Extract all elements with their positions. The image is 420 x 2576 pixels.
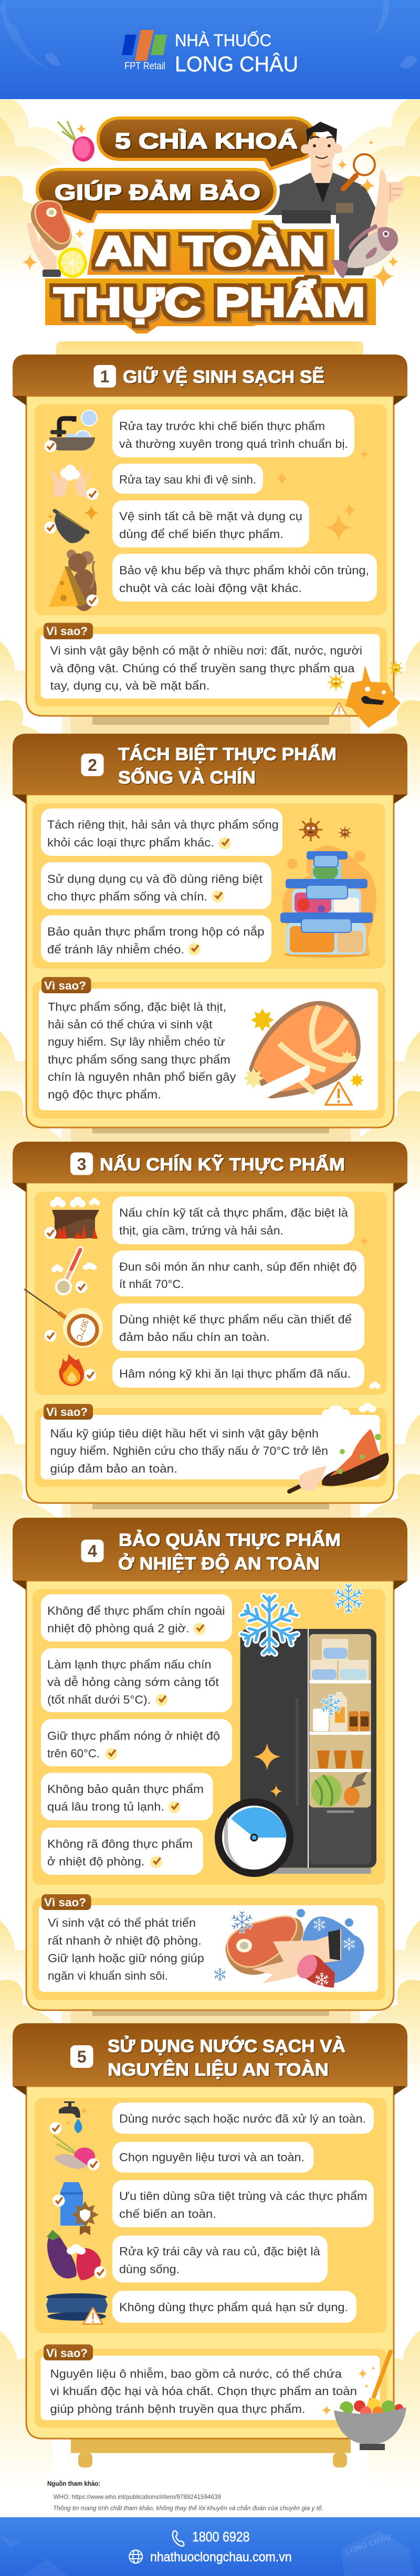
bubble: 5 chìa khoá: 5 CHÌA KHOÁ [115, 128, 298, 153]
table legs [71, 2436, 351, 2467]
tip 1 [112, 2102, 374, 2134]
panel body [26, 1581, 394, 2010]
panel header [13, 2023, 407, 2096]
panel header: Ở NHIỆT ĐỘ AN TOÀN [118, 1553, 320, 1574]
panel header: 2 [88, 756, 97, 775]
panel body [26, 396, 394, 716]
why panel: Vì sao? [46, 625, 88, 638]
tip 3: chế biến an toàn. [119, 2207, 216, 2220]
illustration: frozen meat [214, 1909, 364, 1988]
panel header: 4 [88, 1542, 97, 1561]
brand name: LONG CHÂU [175, 52, 298, 76]
panel header: 1 [100, 367, 109, 386]
tip 4: Rửa kỹ trái cây và rau củ, đặc biệt là [119, 2245, 321, 2258]
why panel: nguy hiểm. Nghiên cứu cho thấy nấu ở 70°C trở lên [50, 1444, 328, 1457]
panel header [13, 355, 407, 405]
why panel [33, 1894, 385, 2000]
why panel [35, 2344, 387, 2428]
icon: snowflakes [241, 1585, 362, 1715]
icon: flame [59, 1354, 97, 1386]
icon: FPT logo [122, 30, 167, 61]
tip 3: để tránh lây nhiễm chéo. [47, 943, 184, 956]
panel header: BẢO QUẢN THỰC PHẨM [119, 1530, 341, 1550]
tip 1: và thường xuyên trong quá trình chuẩn bị. [119, 437, 348, 450]
tip 3: Bảo quản thực phẩm trong hộp có nắp [47, 925, 265, 938]
why panel: Vi sinh vật gây bệnh có mặt ở nhiều nơi: đất, nước, người [50, 644, 362, 657]
why panel: Vì sao? [46, 2347, 88, 2360]
tip 2: cho thực phẩm sống và chín. [47, 890, 207, 903]
tip 3: dùng để chế biến thực phẩm. [119, 528, 284, 541]
bubble: 5 chìa khoá [98, 118, 315, 169]
why panel: giúp phòng tránh bệnh truyền qua thực phẩm. [50, 2402, 306, 2416]
inner tips panel [33, 1589, 385, 1885]
panel: 1 giữ vệ sinh sạch sẽ [13, 355, 407, 728]
sparkle stars [276, 449, 369, 541]
tip 1: Rửa tay trước khi chế biến thực phẩm [119, 420, 325, 433]
tip 2: Làm lạnh thực phẩm nấu chín [47, 1658, 212, 1671]
tip 4 [41, 1773, 213, 1820]
illustration: inspector man [260, 122, 404, 275]
panel header [13, 1142, 407, 1193]
tip 4 [112, 554, 377, 602]
why panel: Vì sao? [44, 1896, 86, 1909]
sources [47, 2480, 323, 2512]
why panel: giúp đảm bảo an toàn. [50, 1462, 177, 1475]
tip 2 [112, 2142, 313, 2173]
icon: angry germ [328, 661, 403, 728]
why panel: chín là nguyên nhân phổ biến gây [48, 1070, 236, 1083]
title: an toàn thực phẩm [54, 228, 365, 325]
why panel: ngộ độc thực phẩm. [48, 1088, 161, 1101]
icon: lemon slice [58, 248, 87, 278]
inner tips panel [35, 1192, 387, 1395]
why panel [33, 977, 385, 1119]
tip 1: khỏi các loại thực phẩm khác. [47, 836, 214, 849]
tip 3 [112, 500, 309, 548]
panel header: NGUYÊN LIỆU AN TOÀN [108, 2060, 329, 2080]
header band with logo [0, 0, 420, 99]
why panel [35, 1404, 387, 1487]
tip 2: Chọn nguyên liệu tươi và an toàn. [119, 2151, 304, 2164]
panel body [26, 2086, 394, 2439]
why panel: rất nhanh ở nhiệt độ phòng. [48, 1934, 202, 1947]
illustration: refrigerator [240, 1629, 376, 1874]
icon: germs [300, 819, 351, 841]
tip 2: Sử dụng dụng cụ và đồ dùng riêng biệt [47, 873, 262, 885]
icon: steak held in hand [26, 200, 71, 277]
sources: WHO: https://www.who.int/publications/i/item/9789241594639 [54, 2493, 221, 2500]
tip 1 [112, 1197, 354, 1244]
icon: temperature dial [218, 1802, 290, 1873]
panel header: 5 [77, 2047, 87, 2066]
tip 1 [112, 410, 354, 457]
icon: sink and faucet [44, 410, 97, 452]
icon: milk carton and badge [52, 2182, 99, 2235]
panel header [13, 734, 407, 804]
tip 3: Ưu tiên dùng sữa tiệt trùng và các thực phẩm [119, 2189, 368, 2203]
why panel: tay, dụng cụ, và bề mặt bẩn. [50, 679, 210, 692]
panel header: TÁCH BIỆT THỰC PHẨM [118, 745, 337, 765]
tip 2 [41, 862, 271, 909]
tip 4 [112, 2236, 328, 2282]
tip 3 [112, 2180, 374, 2227]
tip 3 [41, 1719, 232, 1766]
tip 1 [41, 809, 282, 856]
tip 2: (tốt nhất dưới 5°C). [47, 1693, 151, 1706]
small decorations [360, 1237, 380, 1389]
why panel: ngăn vi khuẩn sinh sôi. [48, 1969, 168, 1982]
panel body [26, 1183, 394, 1503]
tip 5: Không rã đông thực phẩm [47, 1837, 193, 1850]
icon: expired can [46, 2293, 108, 2324]
why panel: Vi sinh vật có thể phát triển [48, 1916, 196, 1929]
tip 3: Dùng nhiệt kế thực phẩm nếu cần thiết để [119, 1313, 352, 1326]
panel: 4 bảo quản thực phẩm [13, 1518, 407, 2010]
panel: 2 tách biệt thực phẩm [13, 734, 407, 1128]
tip 3: trên 60°C. [47, 1747, 100, 1760]
inner tips panel [33, 803, 385, 969]
panel header: NẤU CHÍN KỸ THỰC PHẨM [100, 1155, 345, 1175]
why panel: hải sản có thể chứa vi sinh vật [48, 1018, 213, 1031]
bubble: giúp đảm bảo: GIÚP ĐẢM BẢO [55, 179, 260, 205]
tip 5: ở nhiệt độ phòng. [47, 1855, 145, 1868]
brand name: NHÀ THUỐC [175, 31, 271, 50]
panel header [13, 1518, 407, 1590]
inner tips panel [35, 2098, 387, 2333]
panel header: SỬ DỤNG NƯỚC SẠCH VÀ [108, 2036, 345, 2056]
title: an toàn thực phẩm: AN TOÀN [95, 228, 326, 274]
icon: food probe thermometer: 367°C [74, 1318, 90, 1341]
tip 2: ít nhất 70°C. [119, 1278, 184, 1291]
icon: fish [331, 224, 398, 278]
orange title plate [45, 220, 376, 334]
why panel: Nguyên liệu ô nhiễm, bao gồm cả nước, có thể chứa [50, 2367, 342, 2380]
panel: 5 nước sạch [13, 2023, 407, 2467]
icon: magnifier [343, 154, 375, 189]
icon: soapy hands [50, 464, 99, 500]
why panel: và động vật. Chúng có thể truyền sang thực phẩm qua [50, 662, 355, 675]
why panel: Nấu kỹ giúp tiêu diệt hầu hết vi sinh vật gây bệnh [50, 1427, 319, 1440]
tip 5: Không dùng thực phẩm quá hạn sử dụng. [119, 2301, 348, 2314]
illustration: fruit bowl with fork [321, 2352, 406, 2450]
icon: fish and onion [54, 2135, 100, 2170]
why panel: Vì sao? [46, 1405, 88, 1419]
tip 2: Rửa tay sau khi đi vệ sinh. [119, 473, 256, 486]
sources: Nguồn tham khảo: [47, 2480, 100, 2487]
tip 1: Nấu chín kỹ tất cả thực phẩm, đặc biệt là [119, 1206, 349, 1219]
logo caption: FPT Retail [124, 61, 165, 72]
tip 4: Hâm nóng kỹ khi ăn lại thực phẩm đã nấu. [119, 1367, 351, 1380]
tip 3 [112, 1304, 364, 1351]
panel header: GIỮ VỆ SINH SẠCH SẼ [123, 367, 324, 387]
why panel: vi khuẩn độc hại và hóa chất. Chọn thực phẩm an toàn [50, 2385, 357, 2398]
icon: tap with water drop [49, 2101, 88, 2134]
tip 4: Bảo vệ khu bếp và thực phẩm khỏi côn trùng, [119, 564, 369, 577]
contact phone: 1800 6928 [192, 2529, 250, 2545]
white halo behind main title [40, 223, 381, 336]
contact website: nhathuoclongchau.com.vn [150, 2550, 292, 2564]
tip 4: chuột và các loài động vật khác. [119, 582, 302, 595]
icon: phone [173, 2531, 184, 2546]
tip 4 [112, 1358, 364, 1388]
tip 1: Tách riêng thịt, hải sản và thực phẩm sống [47, 818, 279, 831]
brand name [175, 31, 298, 76]
tip 5 [112, 2291, 356, 2323]
illustration: stir fry wok [289, 1403, 389, 1491]
tip 5 [41, 1828, 203, 1875]
tip 2 [112, 1250, 364, 1296]
why panel: nguy hiểm. Sự lây nhiễm chéo từ [48, 1035, 225, 1048]
tip 2 [41, 1648, 232, 1712]
inner tips panel [35, 404, 387, 615]
icon: thermometer [51, 1250, 97, 1294]
icon: food probe thermometer [24, 1289, 103, 1348]
panel header: 3 [77, 1155, 86, 1174]
sources: Thông tin mang tính chất tham khảo, không thay thế lời khuyên và chẩn đoán của chuyên gia y tế. [53, 2505, 323, 2512]
tip 4: quá lâu trong tủ lạnh. [47, 1800, 164, 1813]
tip 2 [112, 464, 263, 494]
table posts between panels [62, 713, 360, 2025]
icon: boiling pot [44, 1197, 100, 1239]
illustration: stacked food containers [280, 845, 376, 958]
why panel: Vì sao? [44, 979, 86, 992]
footer band: LONG CHÂU [344, 2532, 392, 2557]
tip 3: Vệ sinh tất cả bề mặt và dụng cụ [119, 510, 302, 523]
panel header: SỐNG VÀ CHÍN [118, 767, 256, 788]
tip 3 [41, 916, 271, 962]
tip 4: Không bảo quản thực phẩm [47, 1783, 204, 1796]
why panel: Giữ lạnh hoặc giữ nóng giúp [48, 1952, 204, 1965]
tip 1: thịt, gia cầm, trứng và hải sản. [119, 1224, 284, 1237]
bubble: giúp đảm bảo [37, 169, 275, 223]
icon: onion [58, 121, 94, 162]
tip 4: dùng sống. [119, 2262, 180, 2276]
tip 1: Không để thực phẩm chín ngoài [47, 1604, 225, 1617]
icon: mouse on cheese [49, 550, 99, 611]
icon: cooking pot [44, 505, 99, 543]
icon: eggplant and tomato [47, 2230, 106, 2280]
why panel: Thực phẩm sống, đặc biệt là thịt, [48, 1000, 226, 1013]
panel body [26, 795, 394, 1128]
tip 3: đảm bảo nấu chín an toàn. [119, 1330, 270, 1344]
table top strip [56, 341, 363, 362]
tip 2: Đun sôi món ăn như canh, súp đến nhiệt độ [119, 1260, 357, 1273]
tip 2: và dễ hỏng càng sớm càng tốt [47, 1676, 219, 1689]
title: an toàn thực phẩm: THỰC PHẨM [54, 279, 365, 325]
why panel: thực phẩm sống sang thực phẩm [48, 1053, 230, 1066]
tip 1: Dùng nước sạch hoặc nước đã xử lý an toàn. [119, 2112, 366, 2125]
illustration: salmon steak with warning [243, 1001, 364, 1105]
tip 3: Giữ thực phẩm nóng ở nhiệt độ [47, 1729, 220, 1742]
panel: 3 nấu chín kỹ [13, 1142, 407, 1503]
tip 1 [41, 1594, 232, 1641]
why panel [35, 623, 387, 706]
sparkle stars [22, 123, 399, 288]
tip 1: nhiệt độ phòng quá 2 giờ. [47, 1622, 190, 1635]
title block [22, 118, 404, 336]
icon: globe [129, 2550, 142, 2563]
footer band [0, 2517, 420, 2576]
